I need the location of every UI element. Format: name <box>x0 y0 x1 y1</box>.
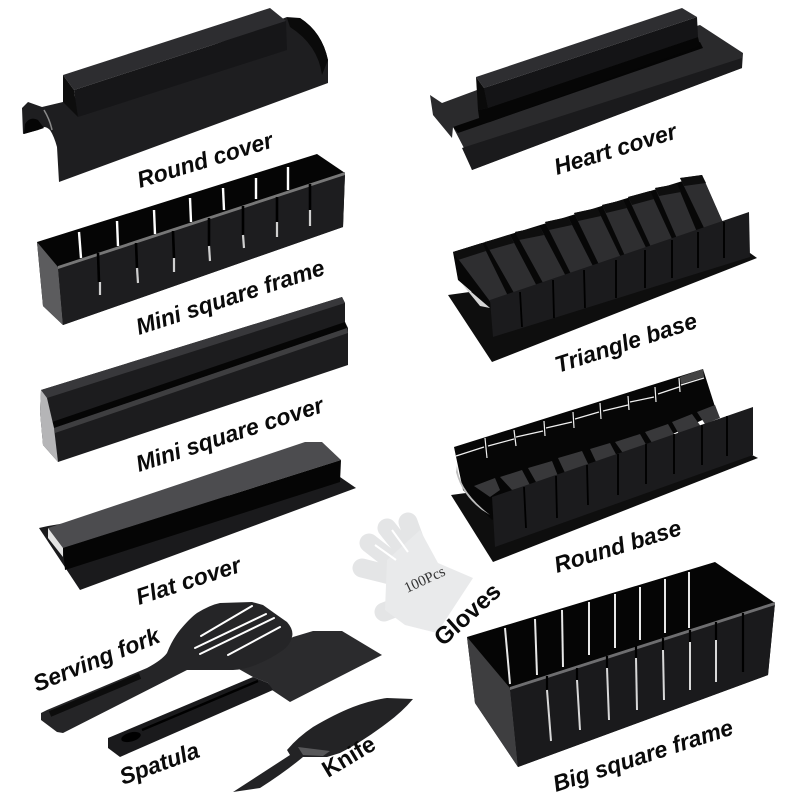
label: spatula: Spatula <box>116 737 203 790</box>
item: mini square frame <box>37 154 345 340</box>
label: triangle base: Triangle base <box>552 307 700 378</box>
item: round cover <box>22 8 328 193</box>
item: gloves <box>362 522 507 651</box>
item: serving fork <box>29 602 292 733</box>
label: 100Pcs: 100Pcs <box>402 564 448 597</box>
label: round cover: Round cover <box>134 127 277 193</box>
item: spatula <box>108 631 382 790</box>
item: big square frame <box>467 562 775 797</box>
item: triangle base <box>448 175 757 378</box>
item: round base <box>451 369 758 578</box>
label: mini square cover: Mini square cover <box>133 391 328 477</box>
label: heart cover: Heart cover <box>551 118 681 180</box>
label: round base: Round base <box>551 514 685 578</box>
item: knife <box>233 698 413 792</box>
label: knife: Knife <box>317 730 380 782</box>
label: mini square frame: Mini square frame <box>133 254 328 340</box>
label: serving fork: Serving fork <box>29 622 164 697</box>
item: heart cover <box>430 8 743 180</box>
label: big square frame: Big square frame <box>550 714 736 797</box>
label: gloves: Gloves <box>429 578 507 651</box>
item: mini square cover <box>40 297 348 477</box>
label: flat cover: Flat cover <box>133 551 245 610</box>
item: flat cover <box>39 442 356 610</box>
